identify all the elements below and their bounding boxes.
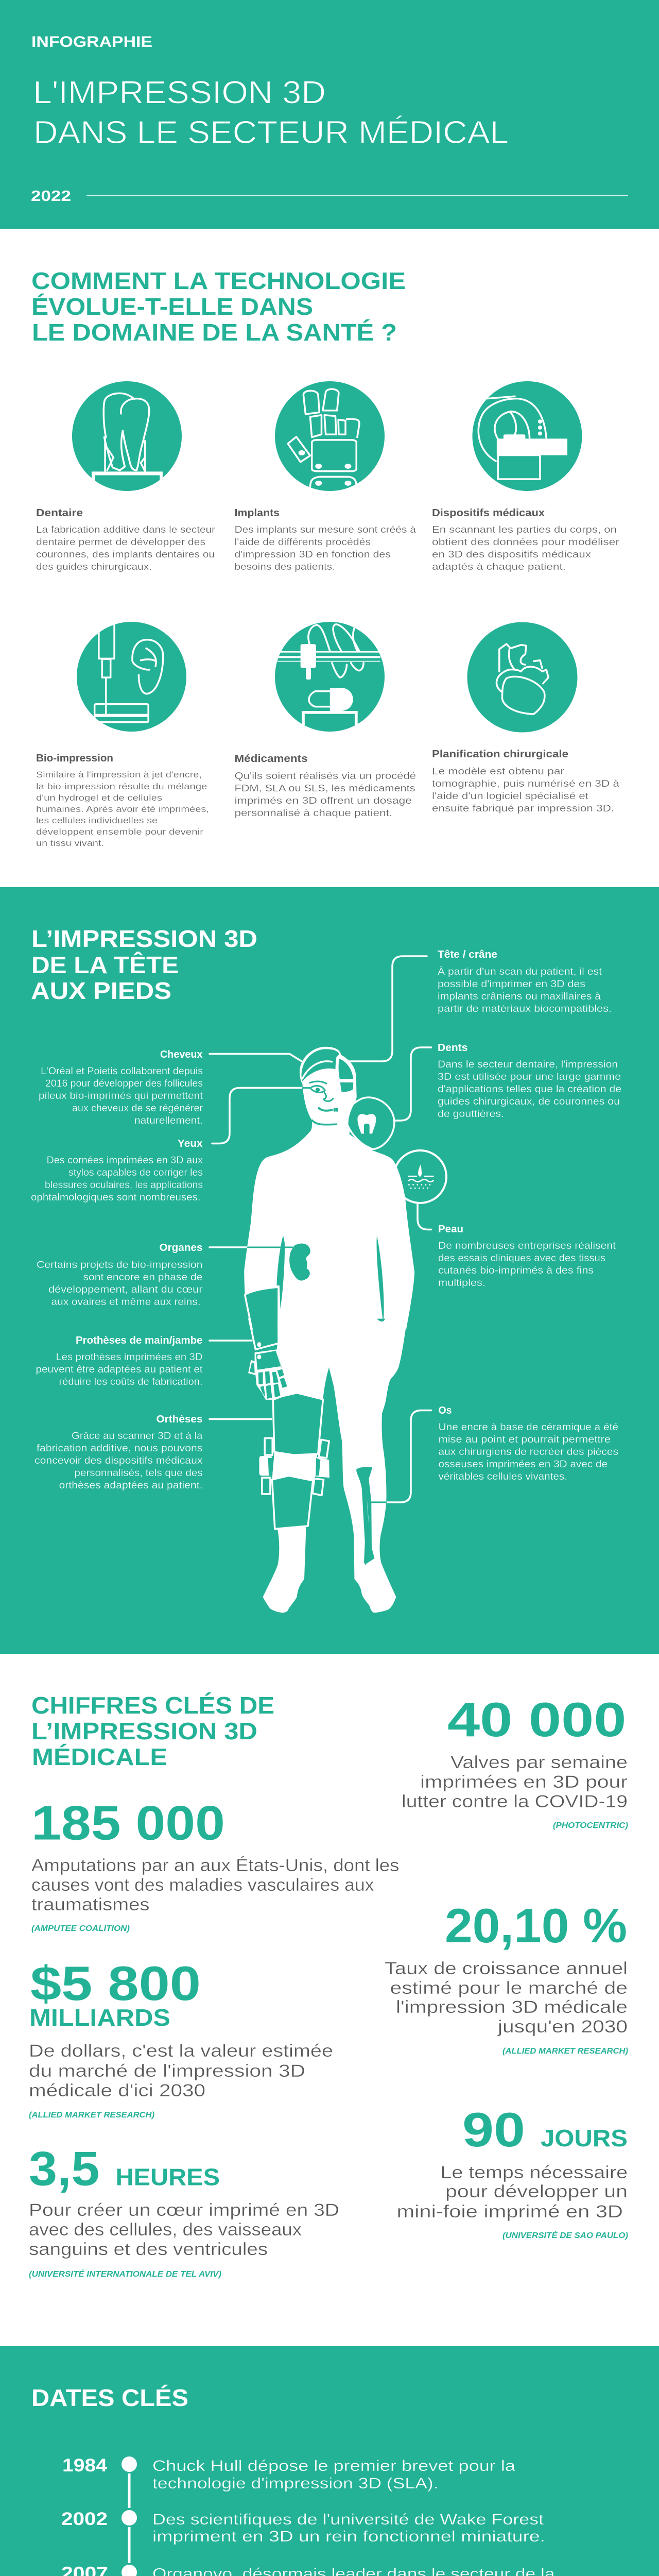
stat: 5 800 milliards [29,1956,333,2120]
text: dentaire: Dentaire [36,507,83,519]
callout: organes: aux ovaires et même aux reins. [51,1297,201,1308]
callout: dents: d'applications telles que la création de [438,1084,621,1095]
arm gaps [276,1235,285,1309]
stat: 3,5 heures: HEURES [115,2164,220,2191]
text: bio-impression: la bio-impression résulte du mélange [36,782,207,791]
callout: prothèses: réduire les coûts de fabrication. [59,1377,203,1387]
callout: tête crâne: À partir d'un scan du patient, il est [438,967,602,977]
callout: prothèses: peuvent être adaptées au patient et [36,1364,203,1375]
knee orthosis [259,1393,330,1529]
section heading: COMMENT LA TECHNOLOGIE [31,267,406,294]
section heading: DATES CLÉS [31,2384,188,2411]
callout: peau: des essais cliniques avec des tissus [438,1253,605,1264]
text: médicaments: Qu'ils soient réalisés via un procédé [235,770,416,781]
callout: orthèses: fabrication additive, nous pouvons [37,1443,203,1454]
callout: cheveux: 2016 pour développer des follicules [45,1078,203,1089]
stat: 185 000: traumatismes [31,1895,149,1914]
kidney [289,1244,310,1281]
callout: os: véritables cellules vivantes. [439,1471,567,1482]
text: dentaire: des guides chirurgicaux. [36,561,152,572]
main title [33,75,509,150]
callout: cheveux: Cheveux [160,1049,203,1060]
event: 1984: Chuck Hull dépose le premier brevet pour la [152,2458,515,2475]
callout: yeux [31,1138,203,1203]
text: bio-impression: développent ensemble pour devenir [36,827,203,837]
stat: 20,10 %: estimé pour le marché de [390,1978,628,1998]
icon: planification chirurgicale [467,622,578,733]
section heading: L’IMPRESSION 3D [31,1718,257,1744]
main title: L'IMPRESSION 3D [33,75,326,110]
text: médicaments [235,753,416,818]
callout: yeux: blessures oculaires, les applications [45,1180,203,1191]
stat: 20,10 %: 20,10 % [445,1899,627,1953]
timeline axis [122,2456,137,2576]
text: bio-impression: un tissu vivant. [36,838,104,848]
callout: organes: développement, allant du cœur [48,1284,203,1295]
callout: yeux: stylos capables de corriger les [68,1167,203,1178]
stat: 40 000 [402,1692,628,1830]
section heading: AUX PIEDS [31,977,171,1004]
callout connectors [210,956,431,1502]
text: dispositifs médicaux [432,507,619,572]
callout: dents: Dents [438,1042,467,1054]
callout: peau: cutanés bio-imprimés à des fins [438,1265,594,1276]
event: 2007 [61,2564,555,2576]
callout: os: aux chirurgiens de recréer des pièces [439,1447,618,1458]
event: 2002: Des scientifiques de l'université de Wake Forest [152,2511,544,2528]
stat: 90 jours: Le temps nécessaire [441,2163,628,2182]
text: dispositifs médicaux: En scannant les parties du corps, on [432,524,617,535]
callout: orthèses: Grâce au scanner 3D et à la [72,1431,203,1442]
callout: tête crâne: Tête / crâne [438,949,497,960]
callout: prothèses [36,1335,203,1387]
callout: dents: 3D est utilisée pour une large gamme [438,1072,621,1082]
tibia bone [356,1467,374,1565]
panel: dates clés [0,2346,659,2576]
callout: orthèses: orthèses adaptées au patient. [59,1480,203,1491]
text: dentaire: La fabrication additive dans le secteur [36,524,215,535]
text: médicaments: personnalisé à chaque patient. [235,807,392,818]
figure: human silhouette [244,1047,414,1613]
callout: organes: Certains projets de bio-impression [37,1260,203,1270]
text: implants [235,507,417,572]
callout: peau: Peau [438,1224,463,1235]
prosthetic forearm [249,1319,278,1349]
callout: cheveux: naturellement. [134,1115,203,1126]
callout: yeux: Yeux [178,1138,203,1149]
callout: tête crâne: possible d'imprimer en 3D des [438,979,585,990]
callout: cheveux: pileux bio-imprimés qui permettent [39,1091,203,1101]
section heading: LE DOMAINE DE LA SANTÉ ? [32,319,397,346]
text: médicaments: FDM, SLA ou SLS, les médicaments [235,783,415,793]
text: planification chirurgicale: tomographie, puis numérisé en 3D à [432,778,620,789]
callout: organes [37,1242,203,1308]
event: 2002: 2002 [61,2509,108,2529]
main title: DANS LE SECTEUR MÉDICAL [33,115,509,150]
stat: 3,5 heures [29,2141,339,2279]
text: bio-impression: humaines. Après avoir été imprimées, [36,804,209,814]
text: dentaire [36,507,215,572]
text: bio-impression: Bio-impression [36,753,113,764]
stat: 3,5 heures: (UNIVERSITÉ INTERNATIONALE DE TEL AVIV) [29,2269,221,2279]
section heading [31,1692,274,1770]
callout: orthèses [34,1414,203,1491]
event: 1984: 1984 [62,2455,108,2476]
stat: 5 800 milliards: du marché de l'impression 3D [29,2061,305,2081]
stat: 90 jours: JOURS [541,2125,628,2151]
callout: yeux: Des cornées imprimées en 3D aux [46,1155,203,1166]
text: planification chirurgicale: Planification chirurgicale [432,749,568,760]
callout: os: mise au point et pourrait permettre [439,1434,611,1445]
stat: 185 000: causes vont des maladies vasculaires aux [31,1875,374,1895]
stat: 3,5 heures: sanguins et des ventricules [29,2240,268,2259]
callout: tête crâne: partir de matériaux biocompatibles. [438,1004,612,1014]
text: implants: d'impression 3D en fonction des [235,549,391,560]
panel: chiffres clés [29,1692,628,2279]
stat: 5 800 milliards: $5 800 [30,1956,201,2010]
text: bio-impression: les cellules individuelles se [36,816,158,825]
kicker: infographie: INFOGRAPHIE [31,33,152,50]
text: bio-impression: Similaire à l'impression à jet d'encre, [36,770,202,779]
callout: dents [438,1042,621,1120]
text: médicaments: Médicaments [235,753,308,765]
stat: 5 800 milliards: MILLIARDS [29,2004,170,2031]
stat: 90 jours: (UNIVERSITÉ DE SAO PAULO) [502,2230,628,2240]
face details [302,1081,338,1125]
stat: 3,5 heures: Pour créer un cœur imprimé en 3D [29,2200,339,2220]
event: 1984 [62,2455,515,2492]
section heading: ÉVOLUE-T-ELLE DANS [31,293,313,320]
stat: 40 000: 40 000 [447,1692,626,1747]
callout: prothèses: Les prothèses imprimées en 3D [56,1352,203,1363]
callout: orthèses: concevoir des dispositifs médicaux [34,1455,203,1466]
text: implants: l'aide de différents procédés [235,536,371,547]
stat: 90 jours: pour développer un [445,2182,628,2201]
section heading: CHIFFRES CLÉS DE [31,1692,274,1719]
stat: 40 000: imprimées en 3D pour [420,1772,628,1792]
text: bio-impression: d'un hydrogel et de cellules [36,793,162,803]
panel: de la tête aux pieds [0,887,659,1654]
icon: dispositifs médicaux [473,381,582,491]
stat: 5 800 milliards: médicale d'ici 2030 [29,2081,205,2100]
text: dispositifs médicaux: adaptés à chaque patient. [432,561,566,572]
prosthetic hand [248,1349,287,1400]
stat: 90 jours: mini-foie imprimé en 3D [396,2202,623,2222]
icon: bio-impression [77,622,186,732]
stat: 185 000: 185 000 [31,1796,225,1850]
callout: os [439,1405,618,1482]
stat: 185 000: (AMPUTEE COALITION) [31,1924,130,1933]
text: dispositifs médicaux: en 3D des dispositifs médicaux [432,549,592,560]
text: dentaire: dentaire permet de développer des [36,536,205,547]
text: implants: Des implants sur mesure sont créés à [235,524,417,535]
stat: 3,5 heures: 3,5 [29,2141,100,2196]
icon: dentaire [72,381,182,491]
section heading: DE LA TÊTE [31,952,179,978]
year and rule: 2022 [31,188,71,205]
text: planification chirurgicale: ensuite fabriqué par impression 3D. [432,803,614,814]
tooth bubble [348,1097,394,1149]
section heading: L’IMPRESSION 3D [31,925,257,952]
text: planification chirurgicale: l'aide d'un logiciel spécialisé et [432,790,588,801]
stat: 20,10 % [385,1899,628,2056]
stat: 20,10 %: jusqu'en 2030 [497,2017,628,2037]
stat: 40 000: (PHOTOCENTRIC) [553,1821,628,1830]
callout: cheveux: L'Oréal et Poietis collaborent depuis [41,1066,203,1077]
text: médicaments: imprimés en 3D offrent un dosage [235,795,412,806]
event: 2002: impriment en 3D un rein fonctionnel miniature. [152,2528,545,2545]
callout: dents: guides chirurgicaux, de couronnes ou [438,1096,620,1107]
callout: organes: Organes [160,1242,203,1253]
stat: 3,5 heures: avec des cellules, des vaisseaux [29,2220,302,2240]
panel: comment la technologie évolue [31,267,620,848]
stat: 20,10 %: Taux de croissance annuel [385,1959,628,1978]
callout: cheveux: aux cheveux de se régénérer [72,1103,203,1114]
callout: tête crâne: implants crâniens ou maxillaires à [438,991,601,1002]
stat: 90 jours [396,2103,628,2240]
torso and head [244,1047,414,1329]
callout: prothèses: Prothèses de main/jambe [76,1335,203,1346]
callout: peau [438,1224,616,1289]
callout: dents: Dans le secteur dentaire, l'impression [438,1059,618,1070]
callout: dents: de gouttières. [438,1109,504,1120]
lower body [276,1319,407,1613]
text: dentaire: couronnes, des implants dentaires ou [36,549,215,560]
icon: médicaments [275,622,385,732]
hair [302,1049,339,1081]
text: dispositifs médicaux: obtient des données pour modéliser [432,536,619,547]
stat: 20,10 %: l'impression 3D médicale [396,1997,628,2017]
text: bio-impression [36,753,209,848]
lower leg [263,1527,306,1613]
text: dispositifs médicaux: Dispositifs médicaux [432,507,545,519]
section heading [31,925,257,1004]
stat: 5 800 milliards: (ALLIED MARKET RESEARCH) [29,2111,154,2120]
section heading [31,267,406,346]
stat: 185 000: Amputations par an aux États-Unis, dont les [31,1856,400,1875]
text: planification chirurgicale [432,749,620,814]
icon: peau bubble [394,1150,446,1203]
text: implants: Implants [235,507,280,519]
callout: orthèses: Orthèses [157,1414,203,1425]
section heading: MÉDICALE [32,1743,167,1770]
text: planification chirurgicale: Le modèle est obtenu par [432,766,564,776]
event: 2002 [61,2509,545,2545]
callout: cheveux [39,1049,203,1126]
stat: 20,10 %: (ALLIED MARKET RESEARCH) [502,2047,628,2056]
panel: header [0,0,659,229]
stat: 90 jours: 90 [462,2103,525,2157]
callout: organes: sont encore en phase de [83,1272,203,1283]
callout: os: Os [439,1405,452,1416]
stat: 5 800 milliards: De dollars, c'est la valeur estimée [29,2041,333,2061]
text: implants: besoins des patients. [235,561,335,572]
cranial implant [339,1059,353,1079]
callout: orthèses: personnalisés, tels que des [74,1468,203,1479]
callout: tête crâne [438,949,612,1014]
icon: implants [275,381,385,491]
stat: 40 000: lutter contre la COVID-19 [402,1792,628,1811]
event: 1984: technologie d'impression 3D (SLA). [152,2475,439,2492]
stat: 185 000 [31,1796,400,1933]
callout: yeux: ophtalmologiques sont nombreuses. [31,1192,201,1203]
callout: peau: De nombreuses entreprises réalisent [438,1241,616,1251]
callout: os: Une encre à base de céramique a été [439,1422,618,1433]
callout: peau: multiples. [438,1278,485,1289]
callout: os: osseuses imprimées en 3D avec de [439,1459,608,1470]
stat: 40 000: Valves par semaine [450,1753,628,1772]
